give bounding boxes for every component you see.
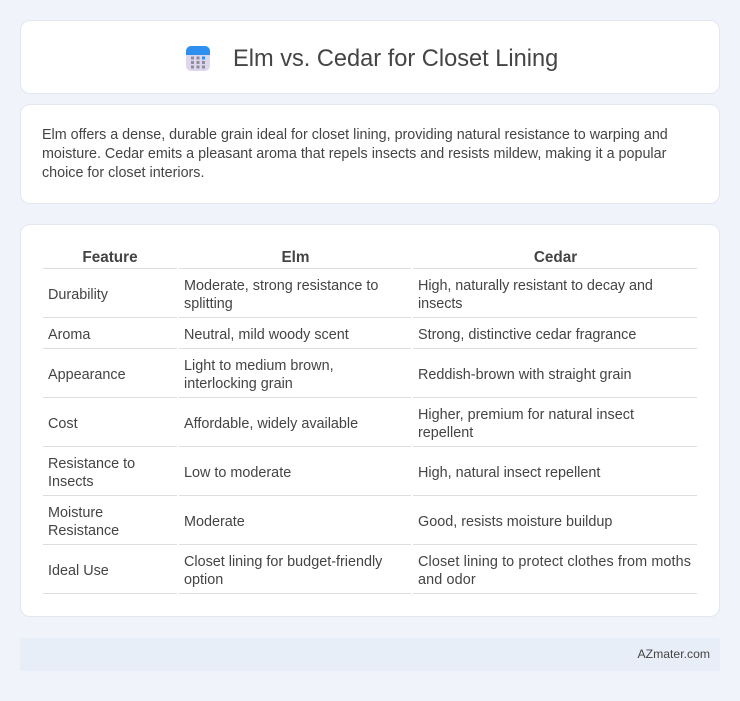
row: Resistance to Insects: High, natural insect repellent [418,465,600,481]
icon: calendar [186,46,210,71]
row: Durability: High, naturally resistant to decay and [418,278,653,294]
footer bar [20,638,720,671]
footer credit: AZmater.com [638,647,710,661]
table header: Feature [82,249,138,266]
row: Durability: insects [418,296,462,312]
row: Resistance to Insects: Low to moderate [184,465,291,481]
intro text panel [20,104,720,204]
row: Appearance: Appearance [48,367,126,383]
row: Moisture Resistance: Resistance [48,523,119,539]
row: Aroma: Neutral, mild woody scent [184,327,349,343]
row: Cost: Affordable, widely available [184,416,358,432]
row: Resistance to Insects [48,456,600,490]
comparison table panel [20,224,720,617]
row: Ideal Use: Closet lining for budget-friendly [184,554,382,570]
row: Moisture Resistance [48,505,612,539]
row: Aroma: Aroma [48,327,90,343]
title: Elm vs. Cedar for Closet Lining [233,46,558,72]
row: Resistance to Insects: Resistance to [48,456,135,472]
row: Appearance [48,358,632,392]
row: Durability: Durability [48,287,108,303]
title panel [20,20,720,94]
row: Ideal Use: Closet lining to protect clothes from moths [418,554,691,570]
intro paragraph: Elm offers a dense, durable grain ideal for closet lining, providing natural resistance to warping and moisture. Cedar emits a pleasant aroma that repels insects and resists mildew, making it a popular choice for closet interiors. [42,126,668,181]
row: Moisture Resistance: Moisture [48,505,103,521]
row: Appearance: Light to medium brown, [184,358,334,374]
row: Cost: Cost [48,416,78,432]
table header: Elm [281,249,310,266]
row: Cost [48,407,634,441]
row: Appearance: Reddish-brown with straight grain [418,367,632,383]
row: Ideal Use: Ideal Use [48,563,109,579]
row: Resistance to Insects: Insects [48,474,94,490]
row: Cost: Higher, premium for natural insect [418,407,634,423]
row: Cost: repellent [418,425,473,441]
table header [82,249,577,266]
row: Ideal Use [48,554,691,588]
row: Ideal Use: option [184,572,223,588]
row: Ideal Use: and odor [418,572,476,588]
row: Aroma: Strong, distinctive cedar fragrance [418,327,636,343]
table header: Cedar [534,249,577,266]
row: Aroma [48,327,636,343]
row: Appearance: interlocking grain [184,376,293,392]
row: Moisture Resistance: Good, resists moisture buildup [418,514,612,530]
row: Durability: splitting [184,296,233,312]
row: Moisture Resistance: Moderate [184,514,245,530]
row: Durability: Moderate, strong resistance to [184,278,378,294]
row: Durability [48,278,653,312]
